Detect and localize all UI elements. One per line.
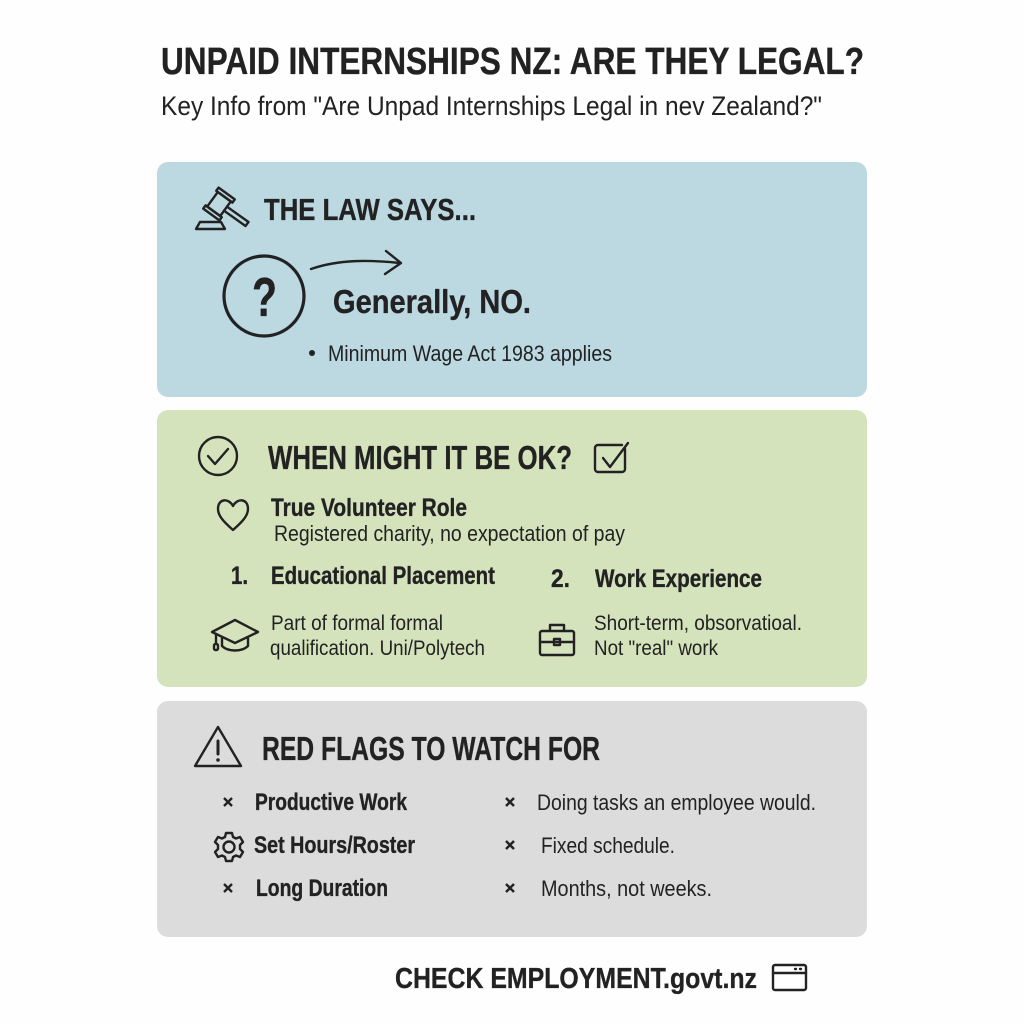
footer link: CHECK EMPLOYMENT.govt.nz <box>395 963 757 995</box>
item: work experience: Work Experience <box>595 565 762 593</box>
text: educational placement details <box>270 612 485 660</box>
panel: red flags <box>157 701 867 937</box>
answer: generally no: Generally, NO. <box>333 283 531 320</box>
row: long duration: Long Duration <box>256 875 388 902</box>
icon: heart <box>218 500 248 530</box>
text: work experience details: Not "real" work <box>594 637 718 660</box>
item: true volunteer role: True Volunteer Role <box>271 494 467 522</box>
row: productive work <box>224 789 816 816</box>
item: educational placement: Educational Placement <box>271 562 496 590</box>
item: true volunteer role: Registered charity, no expectation of pay <box>274 521 625 546</box>
panel: the law says <box>157 162 867 397</box>
row: set hours: Set Hours/Roster <box>254 832 415 859</box>
text: work experience details <box>594 612 802 660</box>
icon: checkbox <box>595 443 628 472</box>
icon: gear <box>215 833 243 861</box>
item: educational placement: 1. <box>231 562 248 590</box>
row: long duration <box>224 875 712 902</box>
heading: red flags: RED FLAGS TO WATCH FOR <box>262 730 600 767</box>
item: work experience: 2. <box>551 565 570 593</box>
subtitle: Key Info from "Are Unpad Internships Legal in nev Zealand?" <box>161 91 822 121</box>
panel: when might it be ok <box>157 410 867 687</box>
icon: briefcase <box>540 625 574 655</box>
icon: browser window <box>773 965 806 990</box>
arrow <box>311 251 401 274</box>
icon: gavel <box>196 188 248 229</box>
text: educational placement details: Part of formal formal <box>271 612 443 635</box>
item: true volunteer role <box>271 494 625 546</box>
row: productive work: Doing tasks an employee would. <box>537 790 816 815</box>
icon: question mark circle: ? <box>252 266 277 328</box>
text: work experience details: Short-term, obsorvatioal. <box>594 612 802 635</box>
icon: graduation cap <box>212 620 258 650</box>
row: long duration: Months, not weeks. <box>541 876 712 901</box>
bullet: minimum wage act: Minimum Wage Act 1983 applies <box>328 341 612 366</box>
row: set hours: Fixed schedule. <box>541 833 675 858</box>
icon: check circle <box>199 437 237 475</box>
item: work experience <box>551 565 762 593</box>
row: set hours <box>215 832 675 861</box>
title: UNPAID INTERNSHIPS NZ: ARE THEY LEGAL? <box>161 41 864 83</box>
text: educational placement details: qualification. Uni/Polytech <box>270 637 485 660</box>
row: productive work: Productive Work <box>255 789 408 816</box>
heading: the law says: THE LAW SAYS... <box>264 192 476 227</box>
icon: question mark circle <box>224 256 304 336</box>
icon: warning triangle <box>195 727 241 766</box>
heading: when might it be ok: WHEN MIGHT IT BE OK? <box>268 439 572 476</box>
